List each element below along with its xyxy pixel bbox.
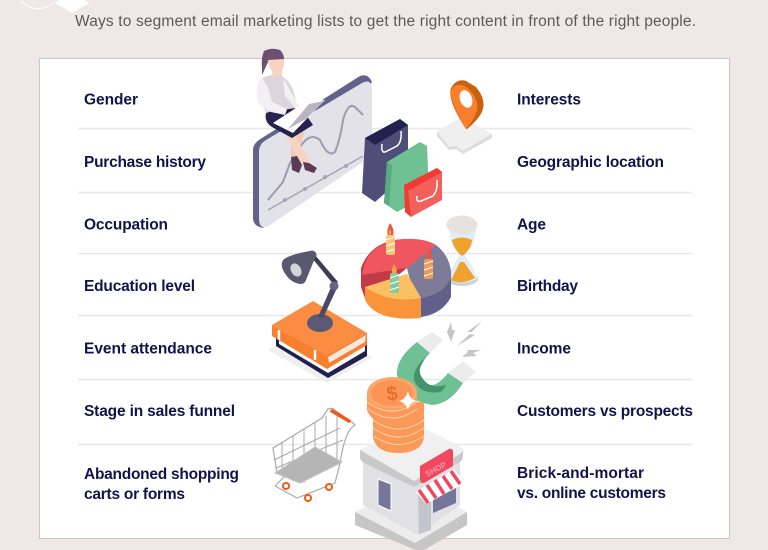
icon: magnet	[397, 321, 482, 405]
left column labels: Gender	[84, 92, 138, 108]
icon: shopping cart	[273, 408, 355, 501]
subtitle: Ways to segment email marketing lists to get the right content in front of the right people.	[75, 13, 696, 30]
right column labels: Income	[517, 340, 571, 358]
right column labels: Geographic location	[517, 154, 664, 171]
icon: desk lamp on books	[268, 250, 373, 383]
left column labels: Education level	[84, 278, 195, 295]
icon: coin stack: $	[385, 382, 399, 406]
left column labels: Purchase history	[84, 154, 206, 171]
left column labels: Event attendance	[84, 340, 212, 358]
left column labels: Occupation	[84, 216, 168, 234]
left column labels	[84, 92, 239, 503]
left column labels: carts or forms	[84, 486, 185, 503]
icon: chart board with woman	[253, 49, 372, 228]
left column labels: Stage in sales funnel	[84, 403, 235, 420]
candle green	[390, 264, 399, 293]
icon: pie cake with candles	[361, 223, 451, 319]
right column labels: Interests	[517, 92, 581, 108]
icon: location pin	[437, 80, 492, 154]
right column labels: Birthday	[517, 278, 578, 295]
panel: segment list	[40, 58, 730, 538]
icon: coin stack	[367, 377, 424, 453]
left column labels: Abandoned shopping	[84, 466, 239, 483]
right column labels	[517, 92, 693, 502]
right column labels: Brick-and-mortar	[517, 465, 644, 482]
decorative top icon remnant	[21, 0, 89, 13]
icon: shopping bags	[362, 119, 442, 217]
candle orange	[424, 248, 433, 279]
icon: shop building	[355, 426, 467, 550]
woman	[257, 49, 325, 173]
right column labels: Age	[517, 216, 546, 234]
icon: shop building: SHOP	[424, 460, 449, 479]
right column labels: Customers vs prospects	[517, 403, 693, 420]
candle red	[386, 223, 395, 255]
icon: hourglass	[446, 216, 478, 286]
right column labels: vs. online customers	[517, 485, 666, 502]
